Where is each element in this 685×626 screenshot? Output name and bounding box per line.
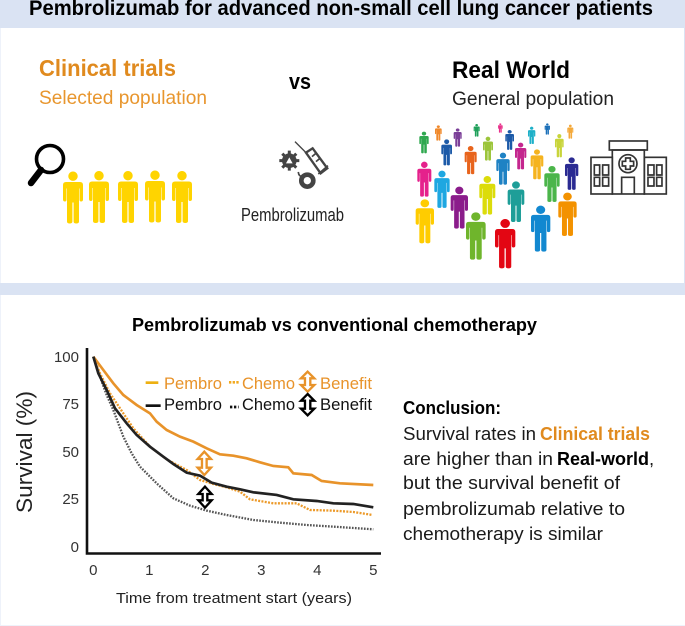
survival chart [12, 348, 381, 607]
curve: real world chemo [93, 357, 373, 529]
curve: real world pembro [93, 357, 373, 507]
legend symbols [146, 372, 314, 415]
subheading: selected population: Selected population [39, 87, 207, 109]
conclusion text block: Survival rates in [403, 423, 536, 444]
y axis labels: 100 [54, 349, 79, 366]
icon: pembrolizumab syringe and antibody [279, 142, 328, 187]
y axis labels: 0 [71, 539, 79, 556]
conclusion text block: pembrolizumab relative to [403, 498, 625, 519]
panel: real world [416, 57, 666, 268]
legend: clinical trials: Pembro [164, 375, 222, 393]
x axis labels: 3 [257, 562, 265, 579]
curve: clinical trial pembro [93, 357, 373, 485]
curve: clinical trial chemo [93, 357, 373, 515]
arrow: real world benefit [198, 487, 212, 508]
icon: selected yellow patients [63, 170, 192, 224]
axes [87, 348, 381, 554]
conclusion text block: Real-world [557, 448, 649, 469]
panel: clinical trials [31, 55, 207, 224]
icon: magnifying glass [31, 146, 64, 183]
x axis labels: 2 [201, 562, 209, 579]
legend: real world: Chemo [242, 396, 295, 414]
y axis title: Survival (%) [12, 391, 37, 513]
y axis labels: 75 [62, 396, 79, 413]
legend: real world: Benefit [320, 396, 372, 414]
x axis title: Time from treatment start (years) [116, 591, 352, 607]
legend: clinical trials [164, 375, 372, 393]
conclusion text block: chemotherapy is similar [403, 523, 603, 544]
conclusion text block: are higher than in [403, 448, 553, 469]
conclusion text block: Clinical trials [540, 423, 650, 444]
heading: real world: Real World [452, 57, 570, 84]
legend: clinical trials: Chemo [242, 375, 295, 393]
label: pembrolizumab: Pembrolizumab [241, 205, 344, 225]
survival curves [93, 357, 373, 529]
conclusion text block [403, 397, 654, 544]
conclusion text block: but the survival benefit of [403, 472, 621, 493]
x axis labels: 4 [313, 562, 321, 579]
icon: hospital [591, 141, 666, 194]
y axis labels [54, 349, 79, 556]
y axis labels: 25 [62, 491, 79, 508]
x axis labels: 5 [369, 562, 377, 579]
x axis labels: 0 [89, 562, 97, 579]
legend: clinical trials: Benefit [320, 375, 372, 393]
icon: crowd of coloured people [416, 123, 578, 268]
x axis labels: 1 [145, 562, 153, 579]
chart heading: Pembrolizumab vs conventional chemotherapy [132, 314, 538, 335]
conclusion text block: , [649, 448, 654, 469]
arrow: clinical trial benefit [198, 452, 211, 475]
label: vs: vs [289, 69, 311, 94]
legend: real world [164, 396, 372, 414]
subheading: general population: General population [452, 89, 614, 110]
x axis labels [89, 562, 377, 579]
y axis labels: 50 [62, 444, 79, 461]
heading: clinical trials: Clinical trials [39, 55, 176, 81]
legend: real world: Pembro [164, 396, 222, 414]
conclusion text block: Conclusion: [403, 397, 501, 418]
